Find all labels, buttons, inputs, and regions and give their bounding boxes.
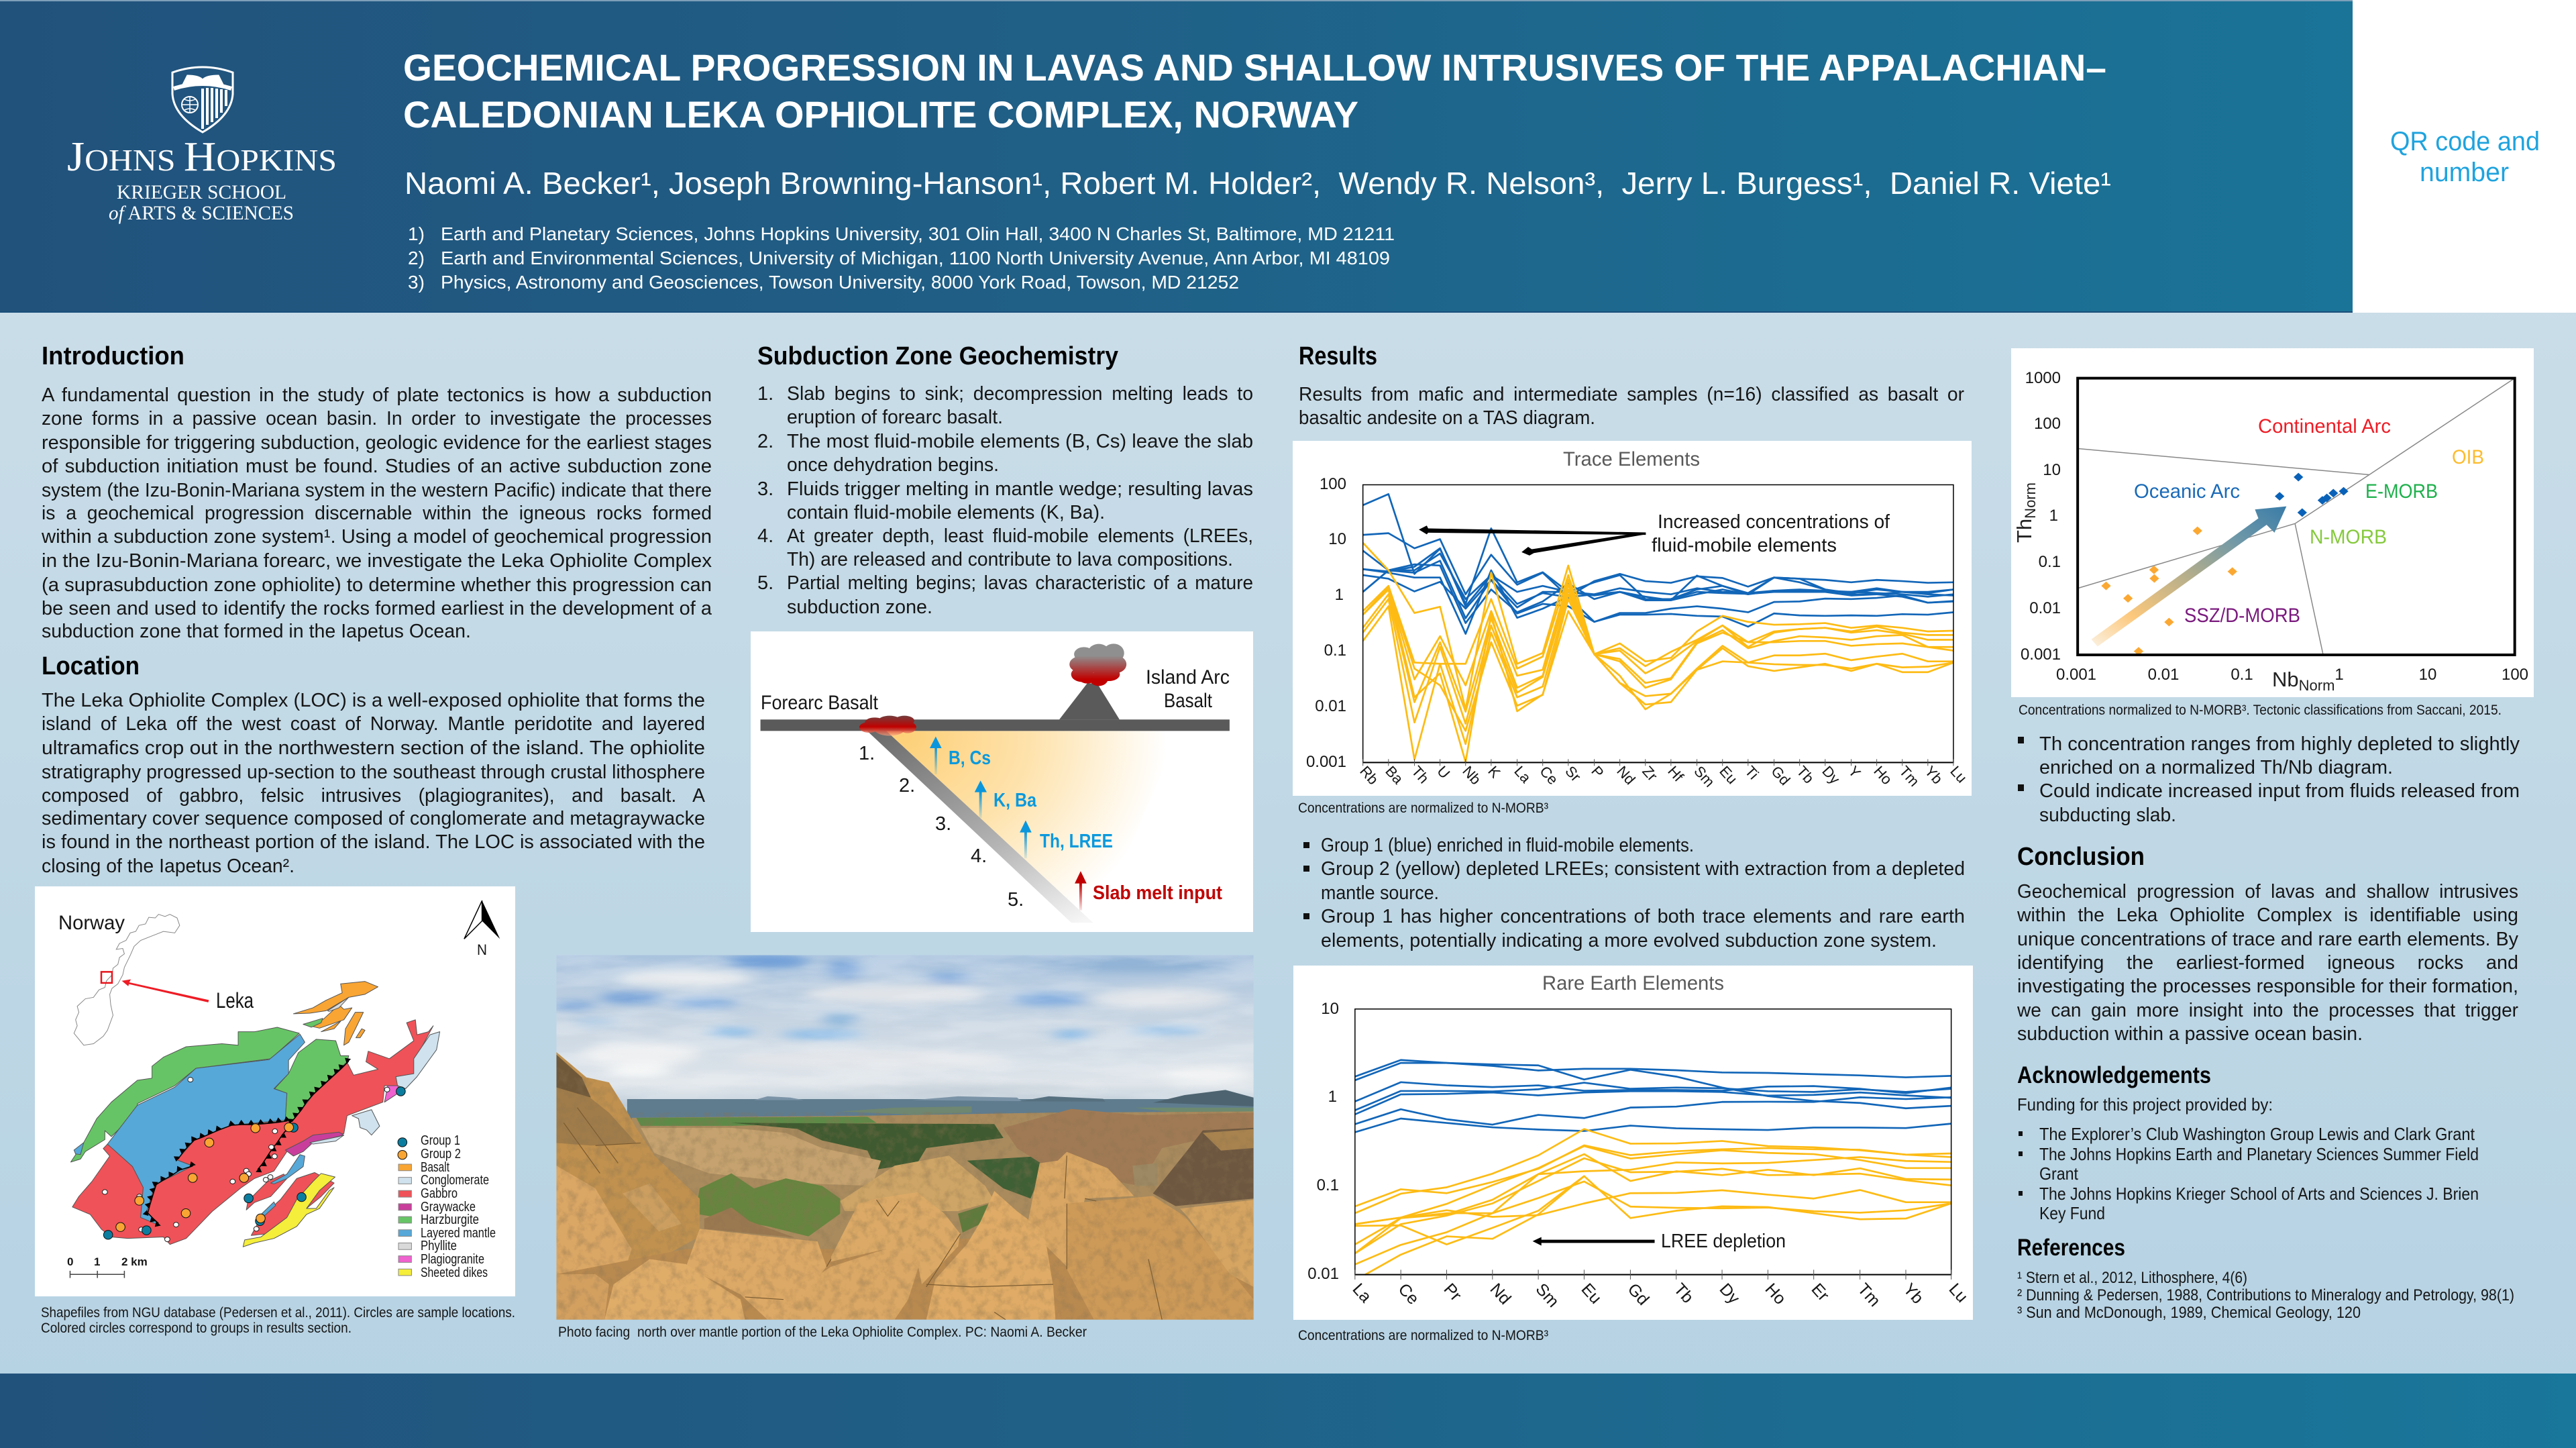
heading: conclusion: Conclusion (2017, 843, 2145, 871)
surface plate (761, 719, 1230, 731)
numbered list: contain fluid-mobile elements (K, Ba). (787, 502, 1105, 523)
authors: Naomi A. Becker¹, Joseph Browning-Hanson¹, Robert M. Holder², Wendy R. Nelson³, Jerry L. Burgess¹, Daniel R. Viete¹ (405, 166, 2111, 201)
funding list: The Johns Hopkins Krieger School of Arts and Sciences J. Brien (2039, 1184, 2479, 1204)
text block: introduction: (a suprasubduction zone ophiolite) to determine whether this progression can (42, 574, 712, 596)
x axis labels: 0.001 (2056, 666, 2096, 684)
right dark rock (1153, 1128, 1254, 1206)
affiliations: Physics, Astronomy and Geosciences, Towson University, 8000 York Road, Towson, MD 21252 (441, 272, 1239, 293)
y axis labels: 0.01 (2029, 599, 2061, 617)
y axis labels: 1000 (2025, 369, 2061, 387)
text block: introduction: A fundamental question in the study of plate tectonics is how a subduction (42, 384, 712, 406)
numbered list: subduction zone. (787, 597, 932, 618)
bullet text: elements, potentially indicating a more evolved subduction zone system. (1321, 930, 1937, 951)
bullet text: Group 1 has higher concentrations of both trace elements and rare earth (1321, 906, 1965, 927)
sample points: group 1 (103, 1087, 407, 1239)
numbered list: Partial melting begins; lavas characteristic of a mature (787, 572, 1253, 594)
field labels: Continental Arc (2258, 415, 2391, 437)
text block: location: closing of the Iapetus Ocean². (42, 856, 294, 877)
eruption cloud (1069, 643, 1126, 686)
y axis labels (2021, 369, 2061, 664)
annotation: fluid-mobile elements: Increased concentrations of (1658, 511, 1890, 533)
map legend labels: Group 1 (421, 1133, 460, 1148)
diagram labels: Basalt (1164, 690, 1213, 712)
map labels: Leka (216, 988, 254, 1013)
chart: rare earth elements (1293, 966, 1973, 1320)
x axis labels: Gd (1768, 763, 1794, 788)
y axis labels: 0.001 (1306, 753, 1346, 771)
bullet markers (1303, 842, 1309, 919)
x axis labels: Ce (1536, 763, 1562, 788)
x axis labels: 100 (2502, 666, 2528, 684)
text block: location (42, 690, 706, 877)
diagram: subduction zone (751, 631, 1253, 932)
y axis labels: 100 (2034, 415, 2061, 433)
text block: introduction: be seen and used to identify the rocks formed earliest in the development of a (42, 598, 712, 619)
axis title: Th norm: Th (2012, 519, 2036, 543)
text: Johns Hopkins: JOHNS HOPKINS (67, 134, 337, 180)
reference list: ² Dunning & Pedersen, 1988, Contributions to Mineralogy and Petrology, 98(1) (2017, 1286, 2514, 1304)
text: of Arts and Sciences: of ARTS & SCIENCES (109, 202, 294, 224)
x axis labels: Pr (1440, 1280, 1465, 1305)
diagram labels: 3. (935, 813, 951, 835)
heading: results: Results (1299, 342, 1377, 370)
x axis labels: 0.01 (2148, 666, 2179, 684)
map legend labels: Basalt (421, 1160, 449, 1175)
rock cracks (564, 1108, 1162, 1320)
x axis labels: Hf (1664, 763, 1687, 785)
x axis labels (1356, 763, 1970, 790)
plot area (2078, 378, 2515, 656)
bullet text (1321, 835, 1965, 951)
numbered list: Slab begins to sink; decompression melting leads to (787, 383, 1253, 405)
panel: subduction zone geochemistry (757, 342, 1253, 618)
funding list: Grant (2039, 1163, 2079, 1184)
x axis labels: Nb (1459, 763, 1485, 788)
axis title: Nb norm: Norm (2299, 677, 2334, 694)
reference list (2017, 1269, 2514, 1322)
map labels: 2 km (121, 1255, 148, 1268)
numbered list: 4. (757, 525, 773, 547)
x axis labels: Yb (1921, 763, 1946, 787)
heading: subduction zone geochemistry: Subduction Zone Geochemistry (757, 342, 1118, 370)
caption: map (41, 1305, 515, 1336)
y axis labels: 0.1 (1324, 641, 1346, 660)
x axis labels: Nd (1613, 763, 1639, 788)
text block: conclusion: unique concentrations of trace and rare earth elements. By (2017, 929, 2518, 950)
numbered list: once dehydration begins. (787, 454, 999, 476)
panel: introduction (41, 342, 712, 642)
field labels: SSZ/D-MORB (2184, 605, 2300, 627)
mantle wedge gradient (886, 731, 1179, 931)
x axis labels: P (1588, 763, 1607, 781)
panel: conclusion (2017, 843, 2518, 1045)
Th/Nb bullets: subducting slab. (2039, 805, 2176, 826)
bulleted results (1303, 835, 1965, 951)
panel: acknowledgements (2017, 1062, 2479, 1223)
field labels: OIB (2452, 446, 2484, 468)
affiliations (408, 223, 1395, 293)
plot area (1363, 484, 1953, 766)
legend swatches (398, 1164, 411, 1276)
map legend labels: Graywacke (421, 1200, 476, 1214)
map legend labels: Conglomerate (421, 1173, 489, 1188)
landscape texture (556, 1052, 1254, 1320)
blue sample lines (1363, 494, 1953, 634)
axis title: Th norm: Norm (2022, 482, 2039, 519)
blue sample lines (1355, 1060, 1951, 1132)
text block: introduction: of subduction initiation must be found. Studies of an active subduction zone (42, 456, 712, 477)
annotation: fluid-mobile elements (1652, 511, 1890, 556)
y axis labels: 1 (1328, 1088, 1337, 1106)
numbered list (757, 383, 1253, 618)
field labels: E-MORB (2365, 480, 2438, 503)
arrows: fluid-mobile elements (1419, 525, 1646, 556)
y axis labels: 0.01 (1315, 697, 1346, 715)
y axis labels (1307, 1000, 1339, 1283)
text block: introduction (41, 384, 712, 642)
y axis labels (1306, 475, 1346, 771)
diagram labels: 1. (859, 743, 875, 764)
y axis labels: 100 (1320, 475, 1346, 493)
x axis labels: Ho (1762, 1280, 1790, 1308)
x axis labels: Tb (1793, 763, 1817, 786)
Th/Nb bullets: enriched on a normalized Th/Nb diagram. (2039, 757, 2393, 778)
bullet text: mantle source. (1321, 882, 1439, 904)
chart: Th vs Nb tectonic discrimination (2011, 348, 2534, 697)
map legend labels: Phyllite (421, 1239, 457, 1253)
text block: results: basaltic andesite on a TAS diagram. (1299, 407, 1595, 429)
x axis labels: Tm (1854, 1280, 1884, 1310)
affiliations: Earth and Planetary Sciences, Johns Hopkins University, 301 Olin Hall, 3400 N Charles St, Baltimore, MD 21211 (441, 223, 1395, 244)
text block: conclusion: within the Leka Ophiolite Complex is identifiable using (2017, 904, 2518, 926)
text block: introduction: system (the Izu-Bonin-Mariana system in the western Pacific) indicate that there (42, 480, 712, 501)
diagram labels: 2. (899, 775, 915, 796)
text block: conclusion (2017, 881, 2518, 1045)
heading: acknowledgements: Acknowledgements (2017, 1062, 2211, 1088)
north arrow (464, 900, 500, 939)
Th/Nb bullets (2018, 733, 2520, 826)
panel: results intro (1299, 342, 1964, 429)
diagram labels: B, Cs (949, 747, 991, 769)
heading: Introduction: Introduction (42, 342, 184, 370)
map legend labels (421, 1133, 496, 1280)
x axis labels: Eu (1578, 1280, 1605, 1308)
left cliff (556, 1052, 700, 1320)
text block: location: The Leka Ophiolite Complex (LOC) is a well-exposed ophiolite that forms the (42, 690, 705, 711)
map legend labels: Gabbro (421, 1186, 458, 1201)
caption: photo: Photo facing north over mantle portion of the Leka Ophiolite Complex. PC: Naomi A. Becker (558, 1325, 1087, 1340)
x axis labels: Dy (1819, 763, 1843, 787)
text block: conclusion: Geochemical progression of lavas and shallow intrusives (2017, 881, 2518, 902)
Th/Nb bullets: Could indicate increased input from fluids released from (2039, 780, 2520, 802)
inset locator square (101, 972, 112, 983)
y axis labels: 10 (1328, 530, 1346, 548)
map legend labels: Sheeted dikes (421, 1265, 488, 1280)
volcano (1059, 683, 1120, 719)
QR code placeholder: QR code and (2390, 127, 2540, 156)
funding list: Key Fund (2039, 1203, 2105, 1223)
arrow: K, Ba (975, 780, 987, 818)
funding list: The Explorer’s Club Washington Group Lewis and Clark Grant (2039, 1124, 2475, 1144)
map labels: N (477, 941, 487, 958)
arrow: LREE depletion (1533, 1237, 1655, 1245)
title: CALEDONIAN LEKA OPHIOLITE COMPLEX, NORWAY (403, 93, 1358, 136)
arrow: slab melt input (1075, 871, 1087, 911)
group 1 diamonds (2275, 473, 2349, 517)
y axis labels: 0.001 (2021, 645, 2061, 664)
text block: introduction: within a subduction zone system¹. Using a model of geochemical progression (41, 526, 712, 548)
x axis labels: Lu (1947, 763, 1970, 786)
map labels: 1 (94, 1255, 100, 1268)
bullet text: Group 2 (yellow) depleted LREEs; consistent with extraction from a depleted (1321, 858, 1965, 880)
x axis labels: 0.1 (2231, 666, 2253, 684)
x axis labels: Yb (1900, 1280, 1927, 1308)
sea and distant mountains (627, 1090, 1254, 1121)
x axis labels: Th (1408, 763, 1432, 786)
arrow to Leka (122, 980, 209, 1002)
numbered list: At greater depth, least fluid-mobile elements (LREEs, (787, 525, 1253, 547)
x axis labels: Sm (1690, 763, 1718, 790)
caption: rare earth elements: Concentrations are normalized to N-MORB³ (1298, 1328, 1548, 1343)
x axis labels (1349, 1280, 1972, 1311)
x axis labels: La (1511, 763, 1535, 786)
numbered list: 1. (757, 383, 773, 405)
map geology shapes (70, 900, 500, 1278)
x axis labels: K (1485, 763, 1504, 781)
icon: university shield (172, 67, 233, 132)
yellow sample lines (1363, 543, 1953, 762)
affiliations: 2) (408, 248, 425, 268)
QR code placeholder: number (2420, 158, 2509, 187)
x axis labels: Lu (1945, 1280, 1972, 1306)
plot area (1355, 1009, 1951, 1280)
field labels: Oceanic Arc (2134, 480, 2240, 503)
caption: map: Shapefiles from NGU database (Pedersen et al., 2011). Circles are sample locations. (41, 1305, 515, 1321)
x axis labels: Zr (1639, 763, 1661, 784)
axis title: Nb norm: Nb (2272, 668, 2299, 691)
x axis labels: Er (1808, 1280, 1833, 1305)
yellow sample lines (1355, 1129, 1951, 1275)
x axis labels: Ce (1395, 1280, 1423, 1308)
affiliations: Earth and Environmental Sciences, University of Michigan, 1100 North University Avenue, Ann Arbor, MI 48109 (441, 248, 1390, 268)
sample points: group 2 (116, 1123, 407, 1231)
foreground rocks (556, 1152, 1254, 1320)
x axis labels: Sm (1532, 1280, 1562, 1311)
diagram labels: 5. (1008, 889, 1024, 911)
x axis labels: Ho (1870, 763, 1896, 788)
plot frame (1355, 1009, 1951, 1280)
text block: conclusion: we can gain more insight into the processes that trigger (2017, 1000, 2518, 1021)
x axis labels: 10 (2419, 666, 2436, 684)
map legend labels: Harzburgite (421, 1212, 479, 1227)
footer band (0, 1374, 2576, 1448)
diagram labels (761, 666, 1230, 911)
panel: location (42, 652, 706, 877)
text block: conclusion: subduction within a passive ocean basin. (2017, 1023, 2363, 1045)
y axis labels: 0.1 (1317, 1176, 1339, 1194)
field boundaries (2078, 378, 2515, 654)
field labels: N-MORB (2310, 526, 2387, 548)
text block: conclusion: investigating the processes responsible for their formation, (2017, 976, 2518, 997)
numbered list: 2. (757, 431, 773, 452)
x axis labels: 1 (2334, 666, 2344, 684)
field labels (2134, 415, 2484, 627)
diagram labels: 4. (971, 845, 987, 867)
thrust fault teeth (148, 1061, 349, 1223)
subducting slab (867, 731, 1093, 923)
map legend labels: Plagiogranite (421, 1252, 484, 1267)
affiliations: 1) (408, 223, 425, 244)
sky clouds (550, 954, 1252, 1095)
map legend labels: Group 2 (421, 1147, 461, 1161)
diagram labels: Island Arc (1146, 666, 1230, 688)
text block: location: is found in the northeast portion of the island. The LOC is associated with the (42, 831, 705, 853)
x axis labels: Tm (1896, 763, 1923, 790)
panel: map of Leka (35, 886, 515, 1296)
text block: location: island of Leka off the west coast of Norway. Mantle peridotite and layered (42, 713, 705, 735)
y axis labels: 1 (2049, 507, 2058, 525)
trend arrow (2092, 507, 2286, 647)
caption: Th vs Nb chart: Concentrations normalized to N-MORB³. Tectonic classifications from Saccani, 2015. (2019, 703, 2502, 718)
midground land (632, 1111, 1254, 1280)
plot frame (1363, 484, 1953, 766)
caption: map: Colored circles correspond to groups in results section. (41, 1321, 352, 1336)
title (403, 46, 2106, 136)
chart: trace elements (1293, 441, 1972, 796)
arrow: B, Cs (930, 737, 942, 774)
numbered list: Fluids trigger melting in mantle wedge; resulting lavas (787, 478, 1253, 500)
text block: introduction: responsible for triggering subduction, geologic evidence for the earliest stages (42, 432, 712, 454)
reference list: ¹ Stern et al., 2012, Lithosphere, 4(6) (2017, 1269, 2247, 1287)
plot frame (2078, 378, 2515, 655)
x axis labels: Ba (1382, 763, 1407, 788)
funding list (2017, 1094, 2479, 1223)
text block: results: Results from mafic and intermediate samples (n=16) classified as basalt or (1299, 384, 1964, 405)
text block: conclusion: identifying the earliest-formed igneous rocks and (2017, 952, 2518, 974)
text: Krieger School: KRIEGER SCHOOL (117, 181, 286, 203)
map labels: 0 (67, 1255, 73, 1268)
heading: references: References (2017, 1235, 2125, 1261)
text block: introduction: zone forms in a passive ocean basin. In order to investigate the processes (42, 408, 712, 429)
inset outline of Norway (74, 915, 180, 1045)
diagram labels: Slab melt input (1093, 882, 1222, 904)
x axis labels: U (1434, 763, 1453, 782)
text block: introduction: in the Izu-Bonin-Mariana forearc, we investigate the Leka Ophiolite Complex (42, 550, 712, 572)
diagram labels: Th, LREE (1040, 831, 1113, 852)
diagram labels: K, Ba (994, 790, 1037, 811)
header band (0, 0, 2576, 313)
numbered list: The most fluid-mobile elements (B, Cs) leave the slab (787, 431, 1253, 452)
map labels: Norway (58, 912, 125, 934)
forearc basalt eruption blob (859, 716, 916, 736)
panel: references (2017, 1235, 2514, 1322)
map labels (58, 912, 487, 1268)
x axis labels: Sr (1562, 763, 1585, 785)
numbered list: eruption of forearc basalt. (787, 407, 1003, 428)
photo: Leka landscape (550, 954, 1254, 1320)
Th/Nb bullets: Th concentration ranges from highly depleted to slightly (2039, 733, 2520, 755)
text block: location: sedimentary cover sequence composed of conglomerate and metagraywacke (42, 808, 705, 829)
x axis labels: Rb (1356, 763, 1382, 788)
x axis labels: Y (1845, 763, 1864, 781)
x axis labels: La (1349, 1280, 1375, 1306)
scale bar (70, 1271, 124, 1278)
x axis labels: Tb (1670, 1280, 1697, 1307)
map legend labels: Layered mantle (421, 1226, 496, 1241)
arrow: Th, LREE (1020, 821, 1032, 858)
logo: Johns Hopkins Krieger School (67, 67, 337, 224)
chart title: Rare Earth Elements (1542, 972, 1724, 994)
x axis labels: Nd (1487, 1280, 1515, 1308)
x axis labels (2056, 666, 2528, 684)
geological units (70, 982, 440, 1247)
annotation: fluid-mobile elements: fluid-mobile elements (1652, 535, 1837, 556)
x axis labels: Gd (1624, 1280, 1653, 1309)
funding list: The Johns Hopkins Earth and Planetary Sciences Summer Field (2039, 1144, 2479, 1164)
text block: location: ultramafics crop out in the northwestern section of the island. The ophiolite (42, 737, 705, 759)
text block: introduction: is a geochemical progression discernable within the igneous rocks formed (42, 503, 712, 524)
x axis labels: Ti (1741, 763, 1762, 782)
text block: introduction: subduction zone that formed in the Iapetus Ocean. (42, 621, 471, 642)
text block: results (1299, 384, 1964, 429)
numbered list: 3. (757, 478, 773, 500)
QR code placeholder (2353, 0, 2576, 313)
y axis labels: 1 (1335, 586, 1344, 604)
bullet text: Group 1 (blue) enriched in fluid-mobile elements. (1321, 835, 1694, 856)
text block: location: stratigraphy progressed up-section to the southeast through crustal lithosphere (42, 762, 705, 783)
numbered list: 5. (757, 572, 773, 594)
y axis labels: 0.01 (1307, 1265, 1339, 1283)
y axis labels: 10 (2043, 461, 2061, 479)
y axis labels: 0.1 (2039, 553, 2061, 571)
caption: trace elements: Concentrations are normalized to N-MORB³ (1298, 800, 1548, 816)
numbered list: Th) are released and contribute to lava compositions. (787, 549, 1233, 570)
annotation: LREE depletion: LREE depletion (1661, 1231, 1786, 1252)
heading: Location: Location (42, 652, 140, 680)
title: GEOCHEMICAL PROGRESSION IN LAVAS AND SHALLOW INTRUSIVES OF THE APPALACHIAN– (403, 46, 2106, 89)
y axis labels: 10 (1321, 1000, 1339, 1018)
group 2 diamonds (2101, 527, 2237, 656)
chart title: Trace Elements (1563, 448, 1700, 470)
funding list: Funding for this project provided by: (2017, 1094, 2273, 1115)
text block: location: composed of gabbro, felsic intrusives (plagiogranites), and basalt. A (42, 785, 706, 807)
affiliations: 3) (408, 272, 425, 293)
diagram labels: Forearc Basalt (761, 692, 879, 714)
x axis labels: Eu (1716, 763, 1741, 787)
reference list: ³ Sun and McDonough, 1989, Chemical Geology, 120 (2017, 1304, 2361, 1322)
sample points: white (102, 1078, 390, 1242)
foreground rock base (556, 1224, 1254, 1320)
x axis labels: Dy (1716, 1280, 1743, 1308)
